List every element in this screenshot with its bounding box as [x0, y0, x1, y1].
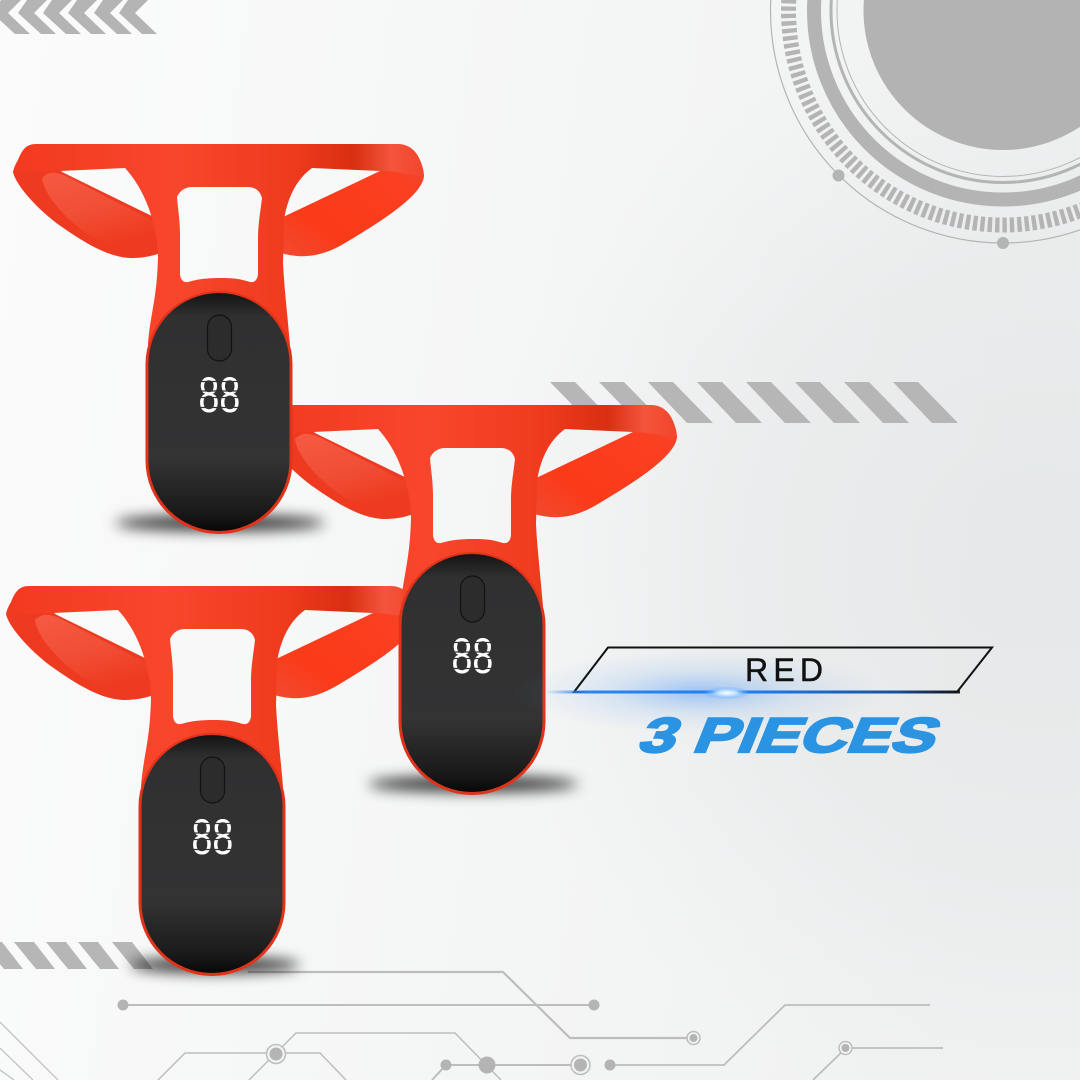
decoration: concentric circle dial top right: [770, 0, 1080, 249]
product: bottom-left red posture device: [6, 586, 417, 976]
decoration: chevron strip top left: [0, 0, 157, 34]
button: [208, 315, 232, 361]
button: [200, 757, 224, 803]
light flare: [703, 686, 751, 700]
digital display: 88: [452, 629, 493, 684]
light beam: [545, 690, 960, 694]
label: colour and quantity callout: [515, 648, 992, 763]
digital display: 88: [192, 810, 233, 865]
colour name: RED: [745, 652, 823, 688]
shadow: [130, 957, 300, 973]
case: [398, 552, 546, 795]
shadow: [368, 776, 578, 792]
left wing: [13, 155, 160, 258]
right wing: [281, 155, 424, 256]
case: [146, 291, 292, 534]
blue light glow: [515, 650, 885, 734]
right wing: [274, 597, 417, 698]
product: top-left red posture device: [13, 144, 424, 534]
shadow: [115, 515, 325, 531]
band and body: [6, 586, 417, 787]
digital display: 88: [198, 368, 240, 423]
decoration: diagonal stripes bottom left: [0, 942, 153, 969]
band and body: [266, 405, 677, 606]
label frame: [574, 648, 992, 692]
case: [138, 733, 286, 976]
left wing: [6, 597, 153, 700]
band and body: [13, 144, 424, 345]
product: middle red posture device: [266, 405, 677, 795]
button: [460, 576, 484, 622]
decoration: diagonal stripes middle: [550, 382, 958, 423]
quantity heading: 3 PIECES: [632, 708, 950, 763]
decoration: circuit lines bottom: [0, 972, 943, 1080]
left wing: [266, 416, 413, 519]
right wing: [534, 416, 677, 517]
